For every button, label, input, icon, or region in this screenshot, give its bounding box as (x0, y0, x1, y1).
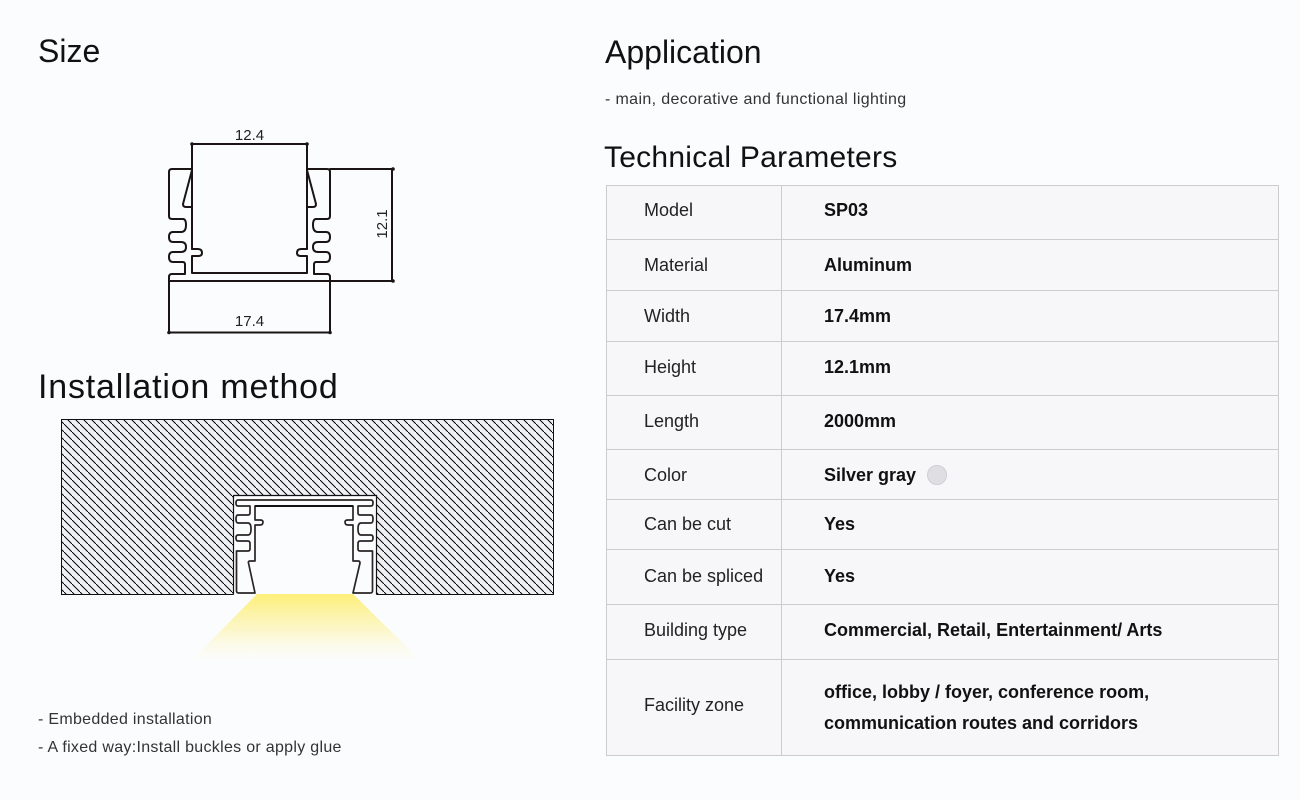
icon: silver gray swatch (927, 465, 947, 485)
heading: Size: Size (38, 33, 100, 69)
row: Model (606, 185, 1279, 239)
row: Facility zone: communication routes and corridors (824, 713, 1138, 733)
dimension drawing: profile size: 12.4 (235, 127, 264, 144)
parameters table (606, 185, 1279, 756)
row: Building type: Commercial, Retail, Entertainment/ Arts (824, 620, 1162, 640)
row: Can be cut: Yes (824, 514, 855, 534)
installation notes: - A fixed way:Install buckles or apply glue (38, 739, 342, 756)
row: Length (606, 395, 1279, 449)
row: Facility zone (606, 659, 1279, 756)
application text: - main, decorative and functional lighting (605, 91, 907, 108)
row: Material: Aluminum (824, 255, 912, 275)
installation notes: - Embedded installation (38, 711, 212, 728)
row: Facility zone: Facility zone (644, 695, 744, 715)
heading: Application: Application (605, 34, 762, 70)
row: Material (606, 239, 1279, 290)
row: Model: Model (644, 200, 693, 220)
row: Length: 2000mm (824, 411, 896, 431)
installation notes (38, 711, 342, 756)
row: Height (606, 341, 1279, 395)
row: Facility zone: office, lobby / foyer, conference room, (824, 682, 1149, 702)
row: Can be spliced (606, 549, 1279, 604)
row: Material: Material (644, 255, 708, 275)
row: Height: Height (644, 357, 696, 377)
dimension drawing: profile size: 17.4 (235, 313, 264, 330)
row: Color (606, 449, 1279, 499)
row: Can be spliced: Can be spliced (644, 566, 763, 586)
heading: Installation method: Installation method (38, 368, 339, 406)
row: Width: Width (644, 306, 690, 326)
row: Length: Length (644, 411, 699, 431)
row: Color: Silver gray (824, 465, 916, 485)
dimension drawing: profile size: 12.1 (374, 209, 391, 239)
row: Model: SP03 (824, 200, 868, 220)
row: Width (606, 290, 1279, 341)
row: Can be cut (606, 499, 1279, 549)
row: Color: Color (644, 465, 687, 485)
heading: Technical Parameters: Technical Parameters (604, 141, 897, 174)
dimension drawing: profile size (167, 127, 395, 334)
row: Height: 12.1mm (824, 357, 891, 377)
row: Building type (606, 604, 1279, 659)
row: Can be spliced: Yes (824, 566, 855, 586)
row: Building type: Building type (644, 620, 747, 640)
row: Can be cut: Can be cut (644, 514, 731, 534)
row: Width: 17.4mm (824, 306, 891, 326)
